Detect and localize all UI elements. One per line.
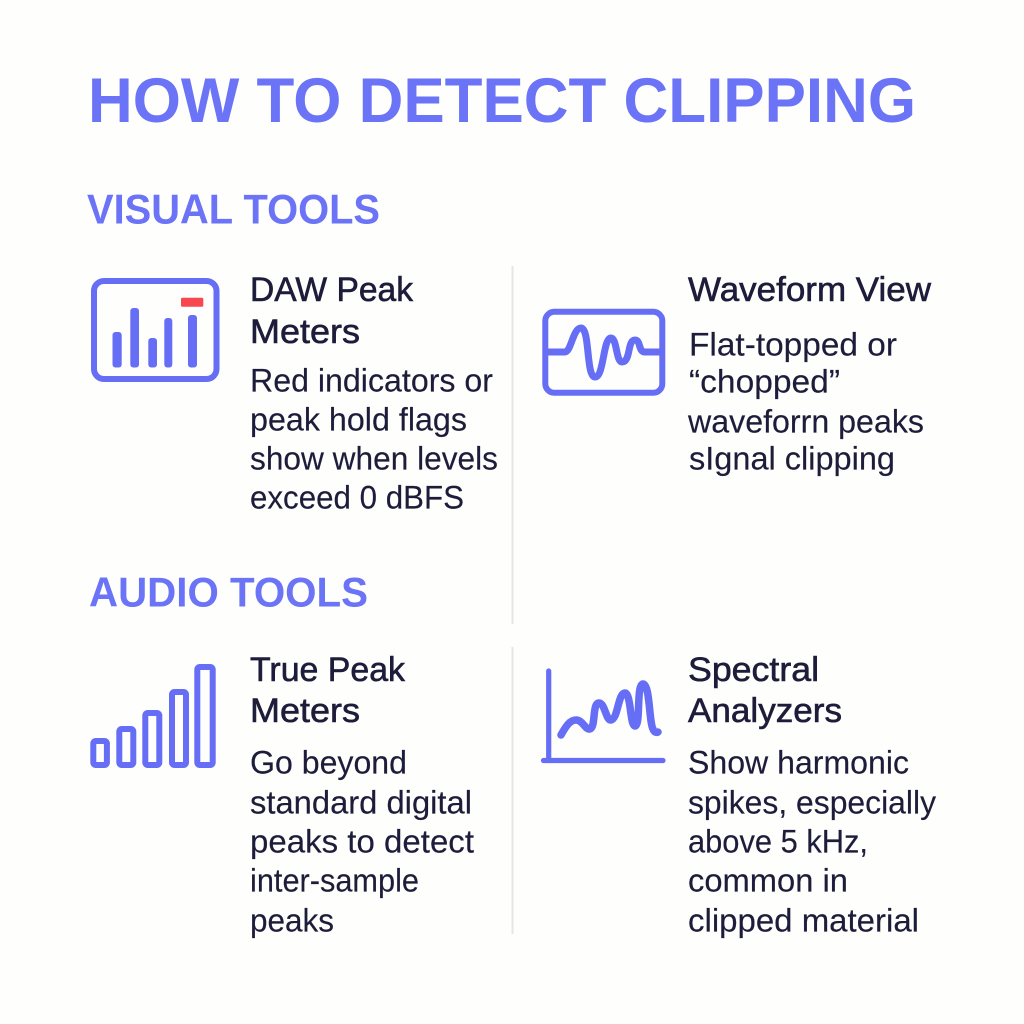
icon: spectrum chart [544,671,663,760]
heading: True Peak Meters: True Peak [250,651,406,689]
icon: waveform [545,312,662,393]
heading: Waveform View: Waveform View [688,271,931,309]
icon: peak meter display [94,281,216,379]
text: DAW description: Red indicators or [250,363,493,399]
heading: DAW Peak Meters: Meters [250,313,360,351]
panel: spectral analyzers [544,651,936,939]
text: spectral description: clipped material [688,903,919,939]
heading: Spectral Analyzers: Spectral [688,651,819,689]
text: waveform description: sIgnal clipping [689,441,895,477]
text: spectral description [688,745,936,939]
text: waveform description: Flat-topped or [689,327,897,363]
text: DAW description: peak hold flags [250,402,467,438]
text: true peak description: standard digital [250,785,472,821]
heading: visual tools: VISUAL TOOLS [87,186,380,232]
text: spectral description: common in [688,863,848,899]
text: DAW description [250,363,498,516]
text: true peak description [250,745,474,939]
heading: Spectral Analyzers [688,651,842,730]
heading: DAW Peak Meters: DAW Peak [250,271,414,309]
text: spectral description: above 5 kHz, [688,824,868,860]
title: HOW TO DETECT CLIPPING [88,66,916,136]
text: DAW description: show when levels [250,441,498,477]
text: true peak description: peaks to detect [250,824,474,860]
text: true peak description: Go beyond [250,745,407,781]
heading: True Peak Meters [250,651,406,730]
panel: DAW peak meters [94,271,498,516]
text: true peak description: peaks [250,903,334,939]
panel: true peak meters [93,651,474,939]
text: true peak description: inter-sample [250,863,419,899]
icon: rising level bars [93,667,213,765]
text: waveform description: “chopped” [689,364,840,400]
heading: True Peak Meters: Meters [250,692,360,730]
heading: DAW Peak Meters [250,271,414,351]
text: spectral description: Show harmonic [688,745,909,781]
text: DAW description: exceed 0 dBFS [250,480,464,516]
heading: audio tools: AUDIO TOOLS [89,568,368,616]
text: waveform description [687,327,924,477]
panel: waveform view [545,271,931,477]
heading: Spectral Analyzers: Analyzers [688,692,842,730]
text: waveform description: waveforrn peaks [687,404,924,440]
text: spectral description: spikes, especially [688,785,936,821]
